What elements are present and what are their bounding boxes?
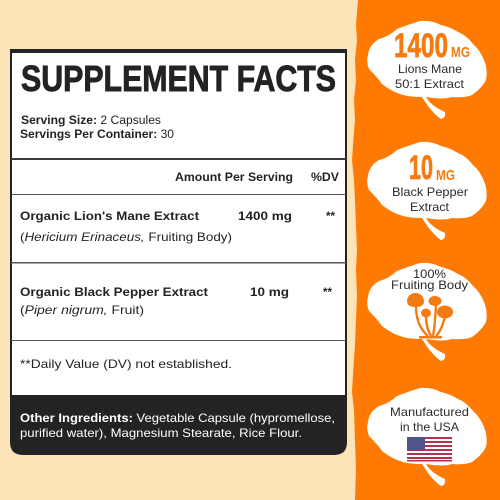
row: black pepper: (Piper nigrum, Fruit): [20, 303, 144, 317]
row: black pepper: **: [323, 285, 332, 299]
callout: 10 mg: Black Pepper: [392, 185, 468, 199]
callout: 100% fruiting body: Fruiting Body: [391, 278, 468, 292]
row: lion's mane: Organic Lion's Mane Extract: [20, 209, 199, 223]
serving info: Serving Size: 2 Capsules: [21, 115, 161, 127]
column headers: Amount Per Serving: [175, 172, 293, 184]
icon: mushrooms: [407, 293, 453, 338]
serving info: Servings Per Container: 30: [20, 129, 174, 141]
row: lion's mane: 1400 mg: [238, 209, 292, 223]
row: black pepper: Organic Black Pepper Extract: [20, 285, 208, 299]
row: black pepper: [20, 285, 332, 317]
callout: 1400 mg: MG: [451, 44, 470, 61]
row: lion's mane: **: [326, 209, 335, 223]
row: lion's mane: [20, 209, 335, 244]
callout: 1400 mg: 1400: [394, 27, 448, 65]
orange torn side panel: [352, 0, 500, 500]
row: black pepper: 10 mg: [250, 285, 289, 299]
callout: made in USA: in the USA: [400, 420, 459, 434]
callout: made in USA: [367, 388, 487, 486]
callout: 10 mg: Extract: [410, 200, 450, 214]
other ingredients band: purified water), Magnesium Stearate, Rice Flour.: [20, 426, 302, 440]
callout: 1400 mg: Lions Mane: [398, 62, 462, 76]
serving info: [20, 115, 174, 141]
callout: 10 mg: 10: [409, 149, 433, 187]
title: SUPPLEMENT FACTS: [21, 58, 336, 99]
callout: made in USA: Manufactured: [390, 405, 469, 419]
other ingredients band: Other Ingredients: Vegetable Capsule (hypromellose,: [20, 411, 335, 425]
callout: 100% fruiting body: 100%: [413, 267, 446, 281]
row: lion's mane: (Hericium Erinaceus, Fruiting Body): [20, 230, 232, 244]
column headers: [175, 172, 339, 184]
callout: 100% fruiting body: [367, 263, 487, 361]
callout: 10 mg: MG: [436, 167, 455, 184]
daily value note: **Daily Value (DV) not established.: [20, 357, 232, 371]
panel: supplement facts: [10, 49, 347, 455]
column headers: %DV: [311, 172, 339, 184]
other ingredients band: [10, 396, 347, 455]
callout: 10 mg: [367, 142, 487, 240]
callout: 1400 mg: [367, 21, 487, 119]
callout: 1400 mg: 50:1 Extract: [395, 77, 465, 91]
icon: US flag: [407, 437, 452, 462]
